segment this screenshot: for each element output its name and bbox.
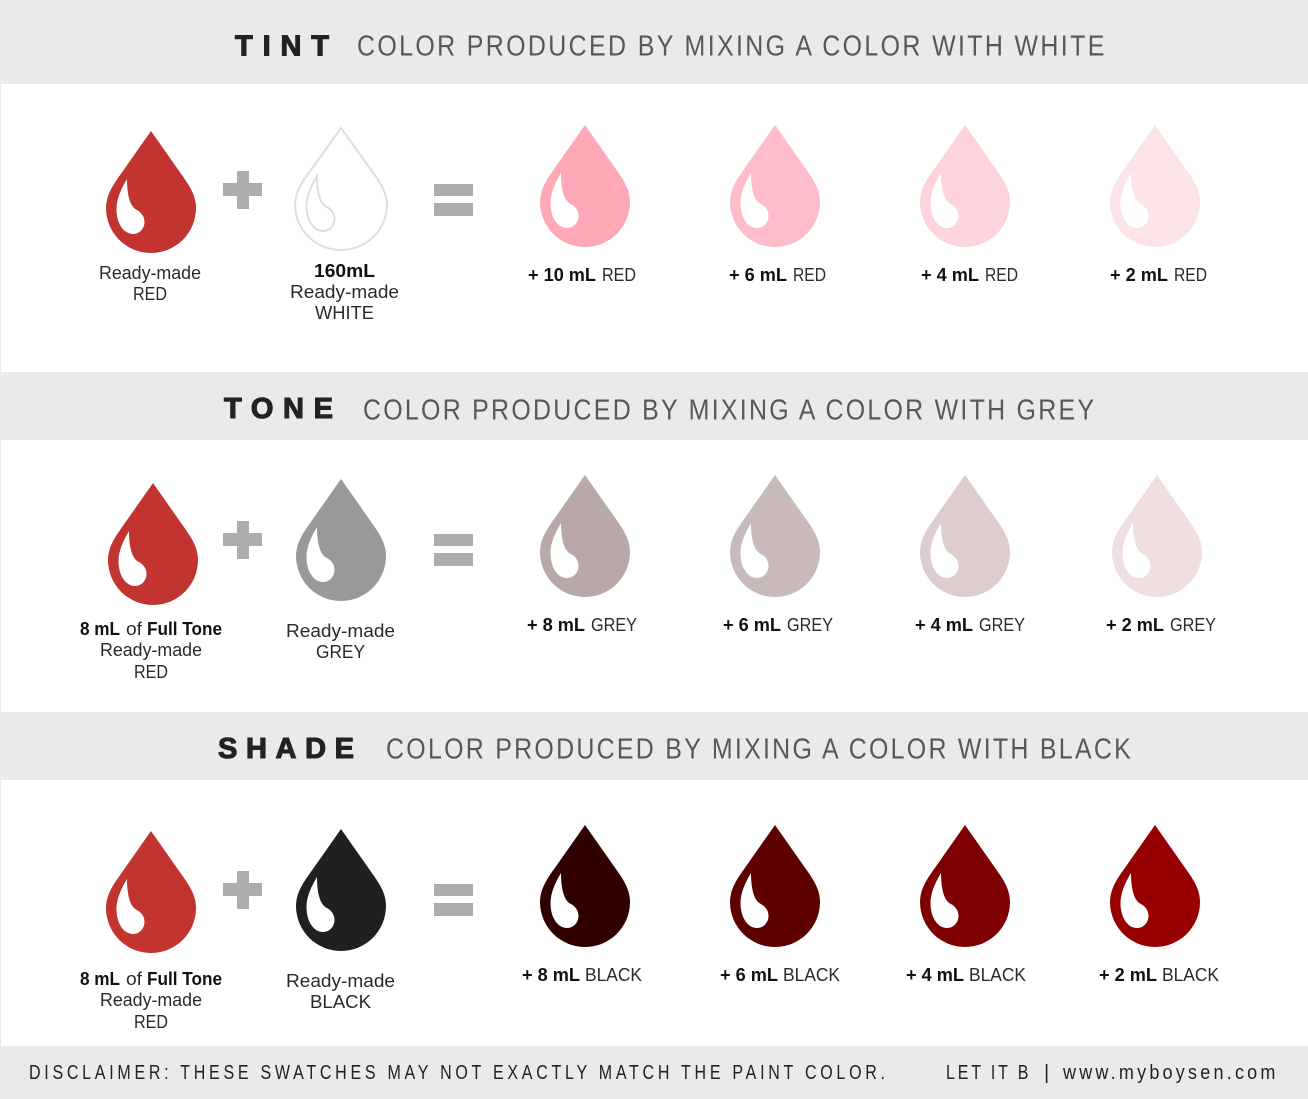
label: 8 mL of full tone ready-made red: 8 mL — [80, 969, 120, 989]
heading: tone: TONE — [224, 393, 333, 425]
icon: plus — [223, 171, 262, 209]
swatch: +2 mL grey: + 2 mL — [1106, 615, 1164, 635]
swatch: +6 mL grey — [723, 475, 833, 635]
label: 8 mL of full tone ready-made red: 8 mL — [80, 619, 120, 639]
label: ready-made black — [286, 971, 395, 1012]
label: 8 mL of full tone ready-made red: Full Tone — [147, 619, 222, 639]
icon: ready-made red drop — [106, 131, 196, 253]
swatch: +4 mL red: RED — [985, 265, 1018, 285]
heading: tint: COLOR PRODUCED BY MIXING A COLOR WITH WHITE — [357, 30, 1104, 62]
swatch: +10 mL red: RED — [602, 265, 636, 285]
heading: tone: COLOR PRODUCED BY MIXING A COLOR WITH GREY — [363, 394, 1094, 426]
swatch: +6 mL grey: + 6 mL — [723, 615, 781, 635]
heading: tint: TINT — [235, 30, 329, 62]
label: ready-made grey: GREY — [316, 642, 365, 662]
label: ready-made red — [99, 263, 201, 304]
swatch: +8 mL black: + 8 mL — [522, 965, 580, 985]
swatch: +4 mL black: BLACK — [969, 965, 1026, 985]
swatch: +2 mL black: BLACK — [1162, 965, 1219, 985]
icon: white drop — [295, 128, 387, 250]
icon: full tone red drop — [108, 483, 198, 605]
swatch: +4 mL grey: GREY — [979, 615, 1025, 635]
heading: shade: COLOR PRODUCED BY MIXING A COLOR WITH BLACK — [386, 733, 1131, 765]
label: 8 mL of full tone ready-made red: RED — [134, 662, 168, 682]
label: 8 mL of full tone ready-made red: RED — [134, 1012, 168, 1032]
swatch: +8 mL black: BLACK — [585, 965, 642, 985]
label: ready-made black: Ready-made — [286, 971, 395, 991]
swatch: +8 mL grey — [527, 475, 637, 635]
swatch: +4 mL black — [906, 825, 1026, 985]
footer: credit: LET IT B — [946, 1061, 1028, 1083]
footer: credit: www.myboysen.com — [1062, 1062, 1275, 1084]
label: 8 mL of full tone ready-made red: Ready-made — [100, 640, 202, 660]
swatch: +6 mL black — [720, 825, 840, 985]
icon: plus — [223, 871, 262, 909]
icon: equals — [434, 534, 473, 566]
label: ready-made grey: Ready-made — [286, 621, 395, 641]
swatch: +10 mL red: + 10 mL — [528, 265, 596, 285]
swatch: +6 mL red: + 6 mL — [729, 265, 787, 285]
label: ready-made grey — [286, 621, 395, 662]
icon: equals — [434, 184, 473, 216]
footer: credit: | — [1044, 1062, 1049, 1084]
footer: disclaimer: DISCLAIMER: THESE SWATCHES MAY NOT EXACTLY MATCH THE PAINT COLOR. — [29, 1061, 885, 1083]
swatch: +10 mL red — [528, 125, 636, 285]
swatch: +6 mL black: BLACK — [783, 965, 840, 985]
icon: plus — [223, 521, 262, 559]
swatch: +2 mL grey: GREY — [1170, 615, 1216, 635]
label: 8 mL of full tone ready-made red: of — [126, 969, 143, 989]
label: 8 mL of full tone ready-made red — [80, 619, 222, 682]
swatch: +4 mL black: + 4 mL — [906, 965, 964, 985]
swatch: +4 mL grey — [915, 475, 1025, 635]
swatch: +8 mL grey: + 8 mL — [527, 615, 585, 635]
swatch: +2 mL grey — [1106, 475, 1216, 635]
label: ready-made black: BLACK — [310, 992, 371, 1012]
icon: grey drop — [296, 479, 386, 601]
swatch: +8 mL black — [522, 825, 642, 985]
swatch: +6 mL black: + 6 mL — [720, 965, 778, 985]
icon: equals — [434, 884, 473, 916]
label: 160mL ready-made white: 160mL — [314, 261, 375, 281]
panel: tone — [80, 475, 1216, 682]
label: 8 mL of full tone ready-made red: Full Tone — [147, 969, 222, 989]
swatch: +2 mL black — [1099, 825, 1219, 985]
panel: shade — [80, 825, 1219, 1032]
swatch: +4 mL red: + 4 mL — [921, 265, 979, 285]
swatch: +8 mL grey: GREY — [591, 615, 637, 635]
label: 160mL ready-made white: Ready-made — [290, 282, 399, 302]
icon: black drop — [296, 829, 386, 951]
label: 8 mL of full tone ready-made red: of — [126, 619, 143, 639]
swatch: +4 mL grey: + 4 mL — [915, 615, 973, 635]
swatch: +6 mL red — [729, 125, 826, 285]
label: 160mL ready-made white — [290, 261, 399, 323]
label: ready-made red: RED — [133, 284, 167, 304]
swatch: +2 mL red: RED — [1174, 265, 1207, 285]
label: 8 mL of full tone ready-made red: Ready-made — [100, 990, 202, 1010]
label: 8 mL of full tone ready-made red — [80, 969, 222, 1032]
swatch: +2 mL black: + 2 mL — [1099, 965, 1157, 985]
icon: full tone red drop — [106, 831, 196, 953]
label: ready-made red: Ready-made — [99, 263, 201, 283]
panel: tint — [99, 125, 1207, 323]
swatch: +2 mL red: + 2 mL — [1110, 265, 1168, 285]
swatch: +6 mL grey: GREY — [787, 615, 833, 635]
footer: credit — [946, 1061, 1275, 1084]
swatch: +4 mL red — [920, 125, 1018, 285]
label: 160mL ready-made white: WHITE — [315, 303, 374, 323]
swatch: +6 mL red: RED — [793, 265, 826, 285]
swatch: +2 mL red — [1110, 125, 1207, 285]
heading: shade: SHADE — [218, 733, 354, 765]
